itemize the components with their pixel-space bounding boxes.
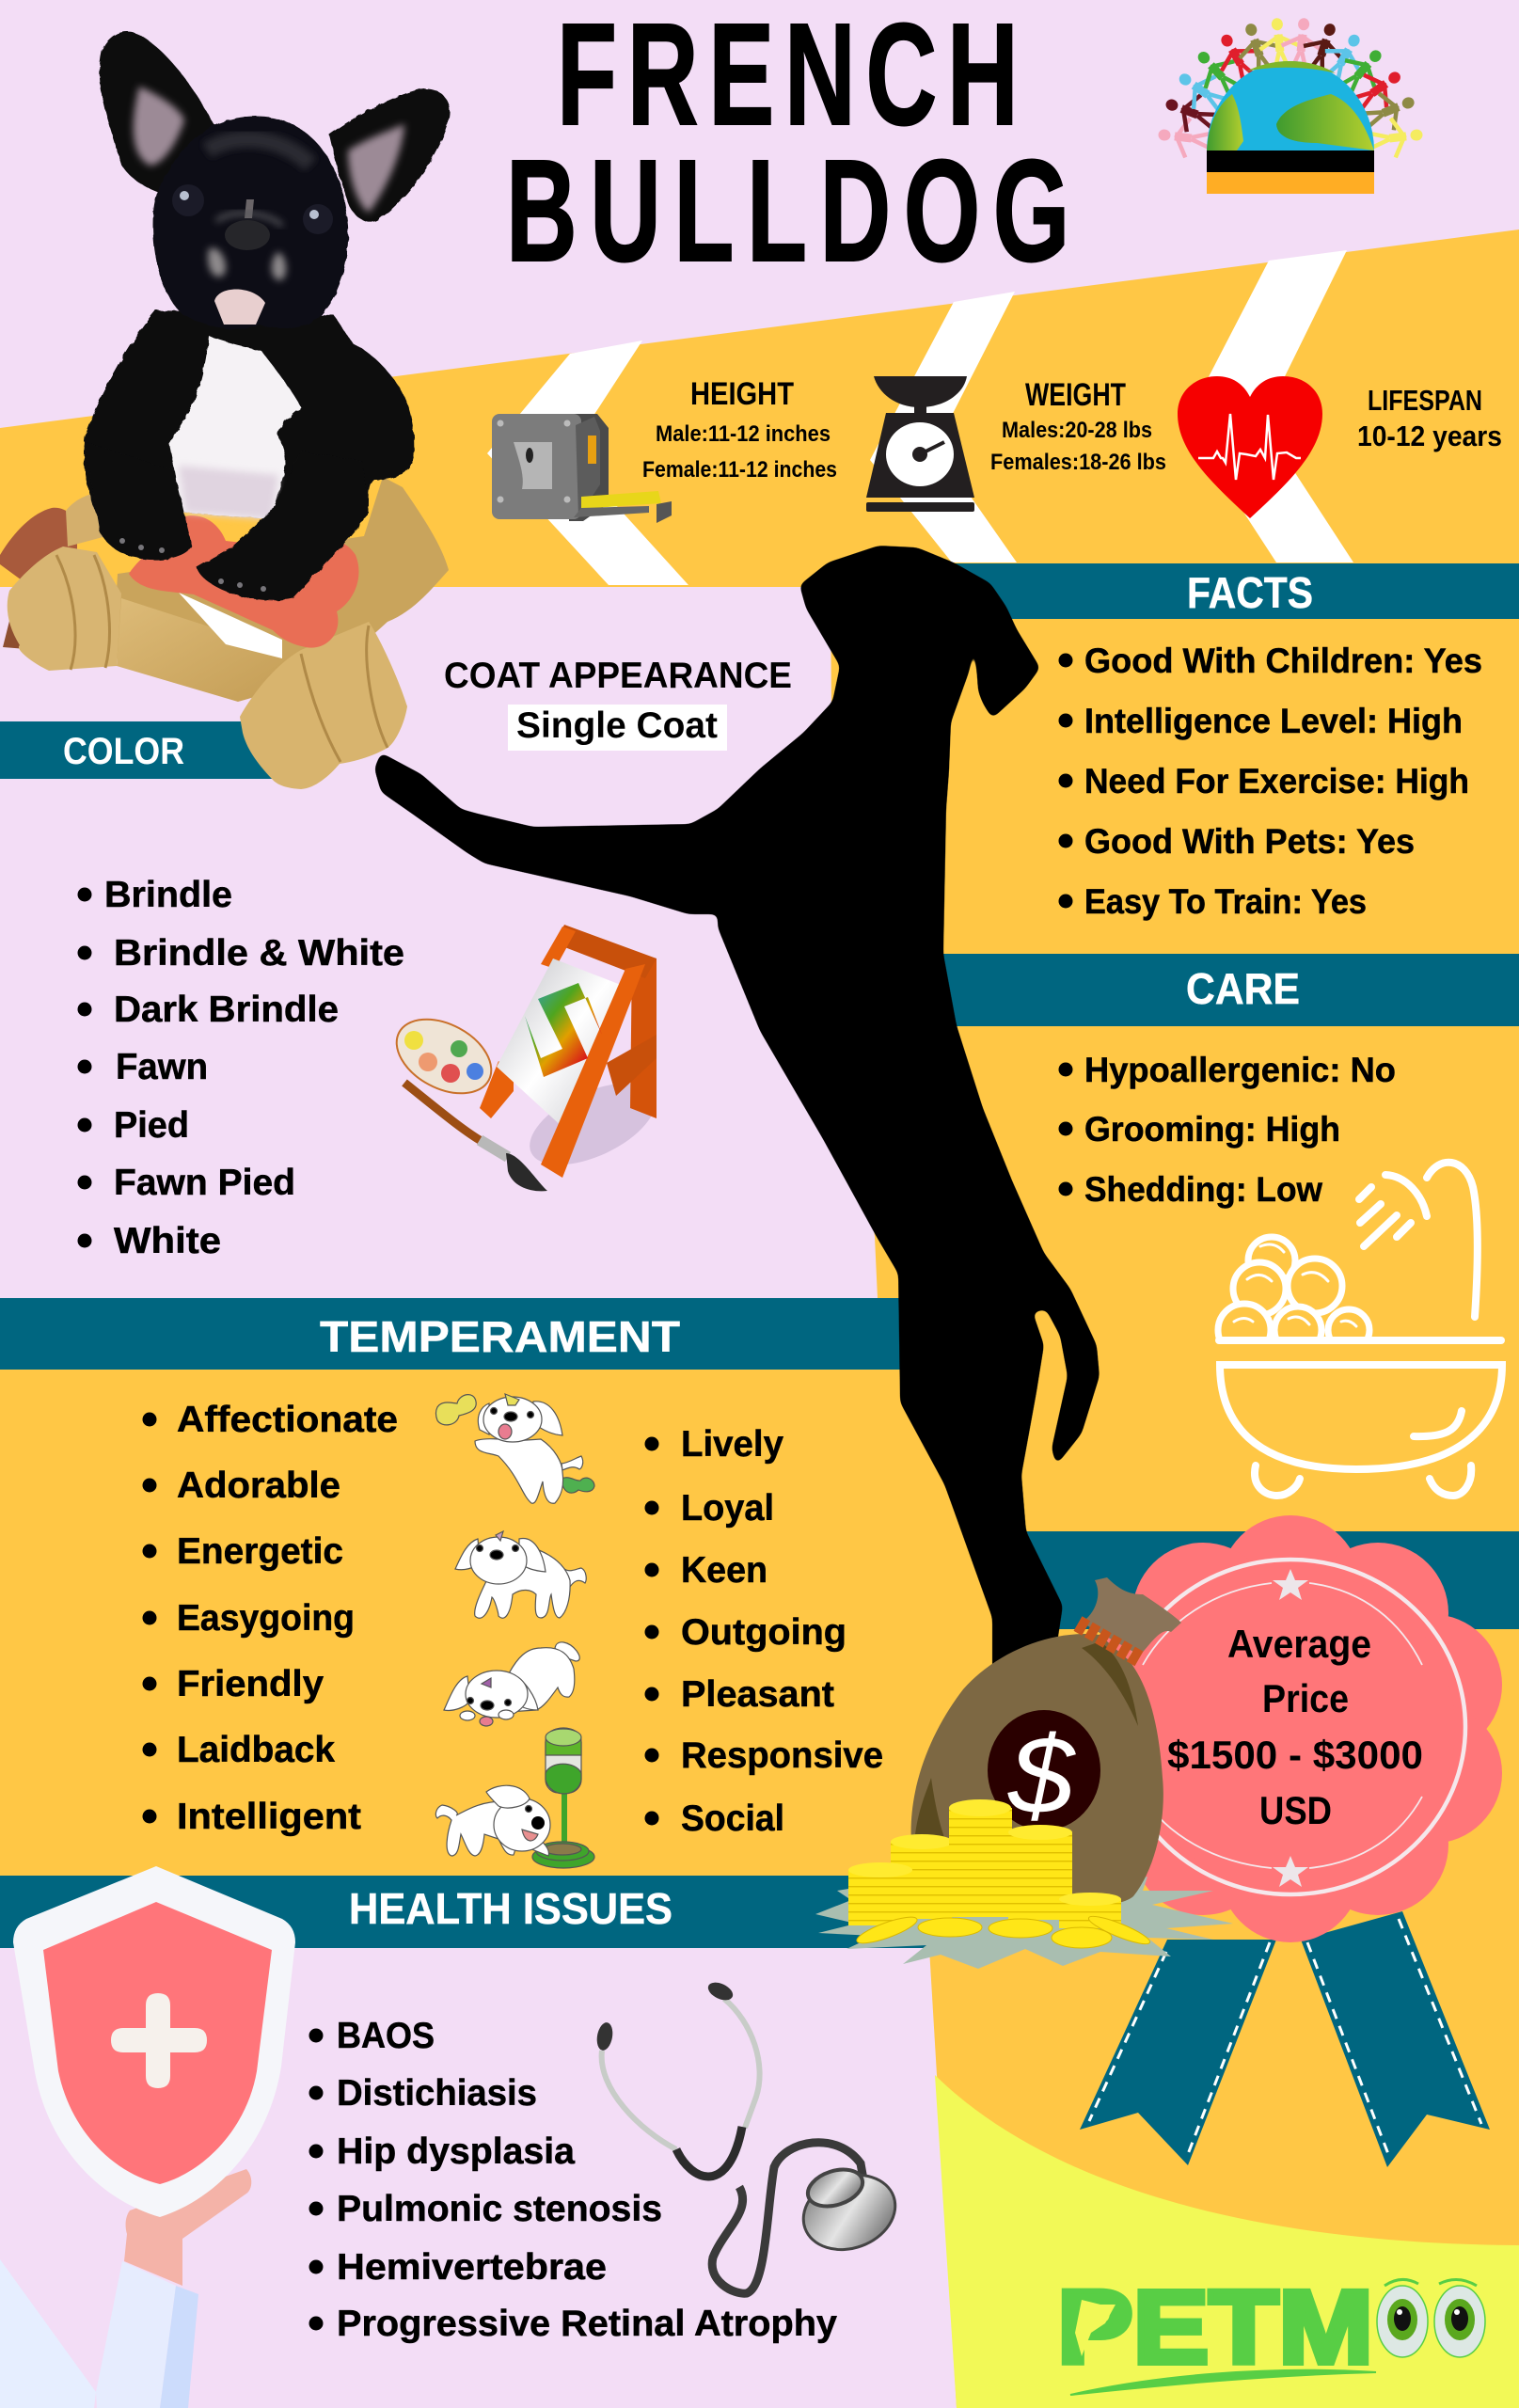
- list: health issues: Hemivertebrae: [337, 2247, 607, 2288]
- list: temperament right: Outgoing: [681, 1612, 847, 1653]
- list: temperament left: Friendly: [177, 1664, 324, 1704]
- list: facts: Easy To Train: Yes: [1084, 882, 1367, 921]
- list: temperament right: Responsive: [681, 1735, 883, 1776]
- text: average price: Price: [1262, 1676, 1349, 1720]
- list: color: Fawn: [116, 1047, 208, 1087]
- list: facts: Intelligence Level: High: [1084, 702, 1463, 740]
- icon: bathtub with shower: [1209, 1163, 1510, 1496]
- icon: easel and palette: [384, 925, 668, 1191]
- heading: coat appearance: Single Coat: [516, 705, 718, 746]
- bones and biscuits: [0, 477, 449, 789]
- heading: temperament: TEMPERAMENT: [320, 1312, 680, 1361]
- text: weight: Females:18-26 lbs: [990, 450, 1166, 475]
- heading: coat appearance: COAT APPEARANCE: [444, 656, 792, 696]
- icon: stethoscope: [595, 1979, 906, 2293]
- list: temperament right: Social: [681, 1798, 784, 1839]
- list: temperament left: Easygoing: [177, 1598, 355, 1639]
- list: health issues: Pulmonic stenosis: [337, 2189, 662, 2229]
- band: price: [1021, 1531, 1519, 1629]
- icon: hand holding shield: [0, 1866, 295, 2408]
- list: color: [77, 875, 404, 1261]
- text: weight: WEIGHT: [1025, 377, 1126, 413]
- list: care: Hypoallergenic: No: [1084, 1051, 1396, 1089]
- icon: puppy with toys: [436, 1394, 594, 1503]
- icon: coin stacks: [848, 1799, 1152, 1949]
- award ribbon tails: [1080, 1911, 1490, 2167]
- heading: care: CARE: [1186, 964, 1300, 1013]
- text: height: HEIGHT: [690, 376, 794, 412]
- list: temperament left: Laidback: [177, 1730, 335, 1770]
- text: lifespan: LIFESPAN: [1368, 384, 1482, 417]
- list: facts: [1059, 642, 1482, 921]
- list: facts: Good With Children: Yes: [1084, 642, 1482, 680]
- icon: heart with pulse: [1178, 376, 1322, 518]
- text: height: Male:11-12 inches: [656, 421, 831, 447]
- band: temperament: [0, 1298, 917, 1370]
- list: temperament left: Intelligent: [177, 1797, 361, 1837]
- list: temperament right: [645, 1424, 883, 1839]
- list: care: Grooming: High: [1084, 1110, 1340, 1149]
- list: temperament left: Affectionate: [177, 1400, 398, 1440]
- lime footer panel: [935, 2075, 1519, 2408]
- heading: facts: FACTS: [1187, 568, 1313, 617]
- heading: color: COLOR: [63, 731, 184, 772]
- silhouette dog: [374, 546, 1100, 1684]
- list: color: Pied: [114, 1105, 189, 1146]
- list: temperament right: Pleasant: [681, 1674, 834, 1715]
- list: color: White: [114, 1221, 221, 1261]
- list: health issues: Progressive Retinal Atrophy: [337, 2304, 837, 2344]
- list: color: Fawn Pied: [114, 1163, 295, 1203]
- list: facts: Good With Pets: Yes: [1084, 822, 1415, 861]
- photo illustration: bulldog on bones: [0, 31, 451, 789]
- band: health issues: [0, 1876, 941, 1948]
- dog body: [84, 31, 451, 527]
- text: average price: USD: [1259, 1788, 1332, 1832]
- text: lifespan: [1357, 384, 1502, 452]
- band: facts: [903, 563, 1519, 619]
- list: facts: Need For Exercise: High: [1084, 762, 1469, 800]
- lilac panel: health section: [0, 1948, 957, 2408]
- text: lifespan: 10-12 years: [1357, 420, 1502, 452]
- list: temperament right: Lively: [681, 1424, 783, 1465]
- price rosette: [1079, 1515, 1502, 1942]
- title: BULLDOG: [506, 130, 1083, 292]
- band: color: [0, 721, 273, 779]
- list: health issues: Hip dysplasia: [337, 2131, 575, 2172]
- list: color: Dark Brindle: [114, 990, 339, 1030]
- logo: petmoo: PETM: [1057, 2270, 1373, 2385]
- band: care: [931, 954, 1519, 1026]
- list: health issues: Distichiasis: [337, 2073, 537, 2114]
- icon: playful puppy: [444, 1642, 579, 1726]
- list: temperament right: Keen: [681, 1550, 767, 1591]
- icon: money bag: $: [1007, 1714, 1077, 1838]
- list: care: Shedding: Low: [1084, 1170, 1322, 1209]
- heading: health issues: HEALTH ISSUES: [349, 1884, 672, 1933]
- list: health issues: [309, 2016, 837, 2344]
- text: average price: [1167, 1622, 1423, 1832]
- icon: globe with people: [1156, 16, 1425, 194]
- list: temperament left: [143, 1400, 398, 1837]
- text: weight: Males:20-28 lbs: [1002, 418, 1152, 443]
- list: temperament left: Energetic: [177, 1531, 343, 1572]
- list: temperament left: Adorable: [177, 1465, 340, 1506]
- icon: money bag: [911, 1577, 1181, 1909]
- chevron stripes: [487, 250, 1353, 585]
- text: height: Female:11-12 inches: [642, 457, 837, 483]
- title: [506, 0, 1083, 292]
- burst behind coins: [815, 1877, 1233, 1969]
- list: care: [1059, 1051, 1396, 1209]
- lilac panel: color section: [0, 587, 878, 1298]
- text: height: [642, 376, 837, 483]
- text: average price: Average: [1227, 1622, 1371, 1666]
- list: health issues: BAOS: [337, 2016, 435, 2056]
- list: color: Brindle & White: [114, 933, 404, 974]
- icon: puppy at feeder: [435, 1728, 594, 1868]
- icon: standing puppy: [455, 1531, 586, 1618]
- logo: petmoo: [1057, 2270, 1485, 2395]
- list: temperament right: Loyal: [681, 1488, 774, 1529]
- text: weight: [990, 377, 1166, 475]
- icon: tape measure: [492, 414, 672, 523]
- text: average price: $1500 - $3000: [1167, 1733, 1423, 1777]
- icon: weighing scale: [866, 376, 974, 512]
- list: color: Brindle: [104, 875, 232, 915]
- heading: coat appearance: [444, 656, 792, 751]
